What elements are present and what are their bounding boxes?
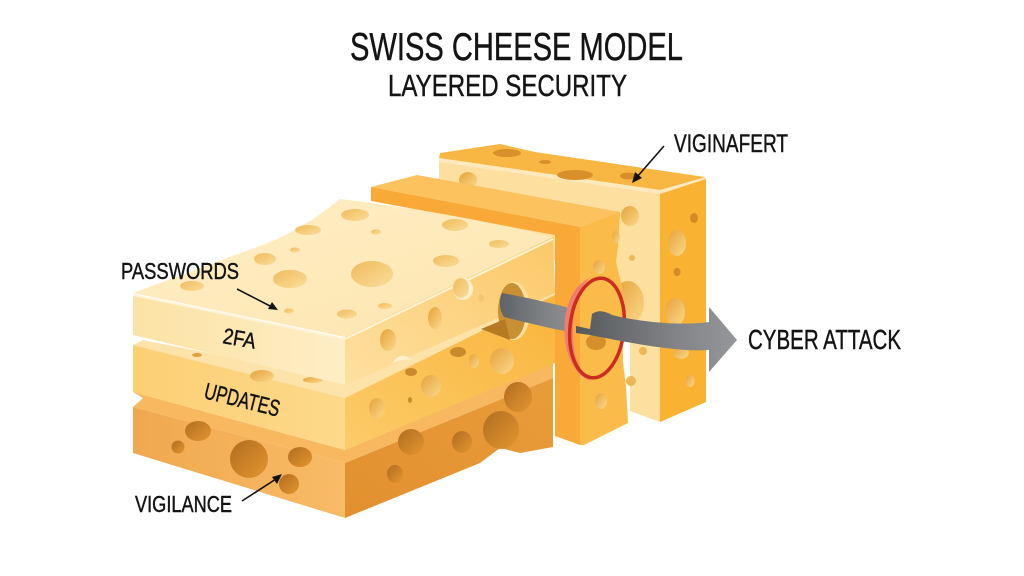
attack arrow: front segment and head xyxy=(576,307,737,372)
breach hole in top layer xyxy=(481,282,530,340)
back cheese block xyxy=(439,144,706,422)
label: viginafert: VIGINAFERT xyxy=(674,130,788,158)
title: SWISS CHEESE MODEL xyxy=(350,26,683,69)
top layer: passwords xyxy=(133,199,555,385)
label: passwords: PASSWORDS xyxy=(121,258,239,284)
arrow: vigilance xyxy=(242,474,282,501)
middle cheese block xyxy=(371,175,628,445)
middle layer: updates xyxy=(133,288,555,450)
bottom layer: vigilance xyxy=(133,363,553,518)
label: cyber attack: CYBER ATTACK xyxy=(748,324,901,355)
label: vigilance: VIGILANCE xyxy=(135,491,232,517)
attack arrow: rear segment xyxy=(500,293,570,332)
label: updates: UPDATES xyxy=(202,378,283,421)
arrow: passwords xyxy=(237,289,278,310)
arrow: viginafert xyxy=(632,146,664,183)
subtitle: LAYERED SECURITY xyxy=(388,68,627,103)
breach ring xyxy=(564,275,629,381)
label: 2FA: 2FA xyxy=(221,323,258,354)
